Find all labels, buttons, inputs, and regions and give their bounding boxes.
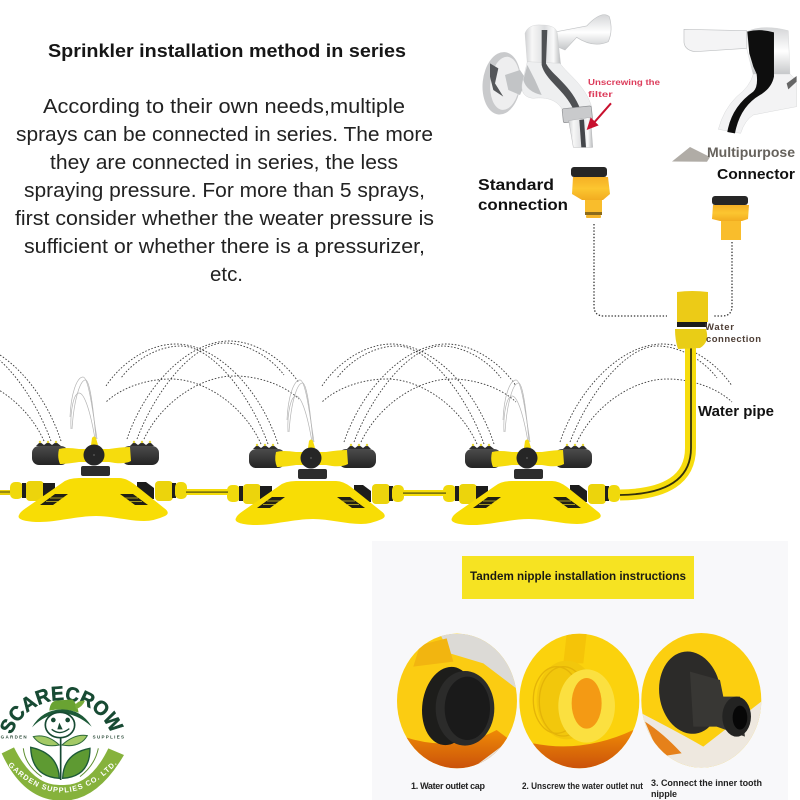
- sprinkler 1: [0, 341, 299, 522]
- title: Sprinkler installation method in series: [48, 41, 406, 61]
- icon: second chrome faucet: [684, 28, 797, 133]
- label: multipurpose connector: Connector: [717, 166, 795, 183]
- small labels: [1, 735, 124, 740]
- plant stem and leaves: [58, 737, 63, 780]
- brand arc text: SCARECROW: [0, 686, 124, 734]
- water connection coupling: [675, 291, 708, 349]
- icon: grey swoosh behind multipurpose label: [672, 147, 710, 162]
- scarecrow face: [45, 712, 75, 738]
- arrow: red pointer to filter: [587, 103, 611, 130]
- small labels: GARDEN: [1, 735, 27, 740]
- label: standard connection: [478, 177, 568, 214]
- photo circles: [397, 632, 763, 770]
- text block: series explanation: sufficient or whether there is a pressurizer,: [24, 236, 425, 258]
- text: unscrewing the filter: Unscrewing the: [588, 77, 660, 87]
- panel: tandem nipple installation instructions: [397, 556, 762, 799]
- icon: standard quick connector: [571, 167, 610, 218]
- label: water connection: connection: [706, 334, 761, 345]
- label: standard connection: connection: [478, 197, 568, 214]
- photo: water outlet cap: [397, 633, 518, 770]
- icon: chrome faucet with filter removed: [479, 15, 660, 147]
- text block: series explanation: spraying pressure. For more than 5 sprays,: [24, 180, 425, 202]
- ribbon text: GARDEN SUPPLIES CO. LTD.: [9, 762, 116, 792]
- label: water connection: [705, 322, 761, 345]
- step labels: 3. Connect the inner tooth: [651, 778, 762, 788]
- scarecrow hat: [49, 699, 79, 713]
- step labels: 1. Water outlet cap: [411, 781, 486, 791]
- label: multipurpose connector: [707, 144, 795, 183]
- step labels: nipple: [651, 789, 677, 799]
- ribbon: [2, 747, 124, 800]
- text block: series explanation: [15, 96, 434, 286]
- heading banner: Tandem nipple installation instructions: [470, 569, 686, 583]
- heading banner: [462, 556, 694, 599]
- step labels: 2. Unscrew the water outlet nut: [522, 781, 643, 791]
- text block: series explanation: they are connected in series, the less: [50, 152, 398, 174]
- step labels: [411, 778, 762, 799]
- connecting hoses between sprinklers: [0, 489, 446, 496]
- text block: series explanation: etc.: [210, 264, 243, 286]
- photo: inner tooth nipple: [640, 632, 763, 770]
- photo: water outlet nut: [518, 633, 640, 770]
- text block: series explanation: sprays can be connected in series. The more: [16, 124, 433, 146]
- dotted connection lines: [594, 224, 732, 316]
- label: standard connection: Standard: [478, 177, 554, 194]
- label: water connection: Water: [705, 322, 734, 333]
- text block: series explanation: first consider whether the weater pressure is: [15, 208, 434, 230]
- water pipe: [620, 345, 691, 495]
- icon: multipurpose quick connector: [712, 196, 749, 240]
- label: multipurpose connector: Multipurpose: [707, 144, 795, 160]
- sprinkler 3: [322, 344, 732, 525]
- text: unscrewing the filter: filter: [588, 89, 614, 99]
- logo: scarecrow garden supplies: [0, 686, 124, 800]
- small labels: SUPPLIES: [93, 735, 124, 740]
- text block: series explanation: According to their own needs,multiple: [43, 96, 405, 118]
- label: water pipe: Water pipe: [698, 403, 774, 420]
- text: unscrewing the filter: [588, 77, 660, 99]
- sprinkler 2: [106, 344, 516, 525]
